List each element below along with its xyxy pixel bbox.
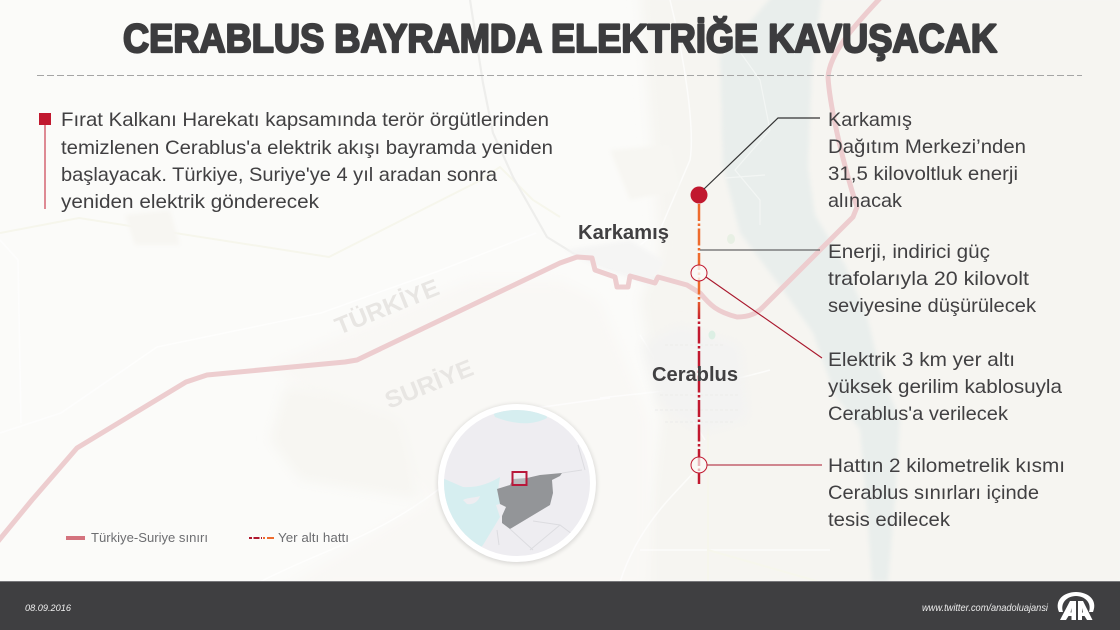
footer bar	[0, 581, 1120, 630]
callout 4: Cerablus sınırları içinde	[828, 482, 1039, 504]
callout 4: tesis edilecek	[828, 509, 950, 531]
callout 3: Elektrik 3 km yer altı	[828, 349, 1015, 371]
title: CERABLUS BAYRAMDA ELEKTRİĞE KAVUŞACAK	[123, 15, 997, 61]
legend: border: Türkiye-Suriye sınırı	[91, 531, 208, 545]
intro paragraph: Fırat Kalkanı Harekatı kapsamında terör örgütlerinden	[61, 109, 549, 131]
cyprus	[463, 496, 480, 504]
border: Türkiye-Suriye sınırı on map	[0, 0, 883, 545]
place labels	[578, 221, 738, 386]
Syria	[497, 473, 562, 529]
intro paragraph: yeniden elektrik gönderecek	[61, 191, 319, 213]
callout 3: yüksek gerilim kablosuyla	[828, 376, 1062, 398]
intro paragraph: başlayacak. Türkiye, Suriye'ye 4 yıl aradan sonra	[61, 164, 497, 186]
legend: underground line: Yer altı hattı	[278, 531, 349, 545]
callout 1: alınacak	[828, 190, 902, 212]
underground power line	[698, 204, 700, 484]
callout lines and markers	[690, 118, 822, 473]
callout 2: trafolarıyla 20 kilovolt	[828, 268, 1030, 290]
callout 3: Cerablus'a verilecek	[828, 403, 1008, 425]
callout 3	[828, 349, 1062, 425]
towns	[565, 240, 665, 285]
callout 4	[828, 455, 1065, 531]
country labels: TÜRKİYE	[331, 274, 443, 341]
callout 1: 31,5 kilovoltluk enerji	[828, 163, 1018, 185]
intro text block	[39, 109, 553, 213]
callout texts	[828, 109, 1065, 531]
callout 2: seviyesine düşürülecek	[828, 295, 1036, 317]
date: 08.09.2016	[25, 603, 72, 614]
place labels: Karkamış	[578, 221, 669, 244]
intro paragraph	[61, 109, 553, 213]
legend: underground line	[249, 531, 349, 545]
sea	[494, 410, 547, 424]
callout 1	[828, 109, 1026, 212]
locator map inset	[430, 404, 597, 564]
bullet marker	[39, 113, 51, 209]
marker: Karkamış distribution centre	[690, 186, 708, 204]
callout 1: Karkamış	[828, 109, 912, 131]
callout 1: Dağıtım Merkezi’nden	[828, 136, 1026, 158]
icon: AA logo	[1058, 592, 1094, 620]
callout 4: Hattın 2 kilometrelik kısmı	[828, 455, 1065, 477]
river	[720, 0, 900, 582]
callout 2: Enerji, indirici güç	[828, 241, 990, 263]
legend	[66, 531, 349, 545]
callout 2	[828, 241, 1036, 317]
country labels	[331, 274, 477, 415]
social link: www.twitter.com/anadoluajansi	[922, 602, 1049, 614]
place labels: Cerablus	[652, 363, 738, 386]
locator box	[512, 472, 526, 485]
intro paragraph: temizlenen Cerablus'a elektrik akışı bayramda yeniden	[61, 137, 553, 159]
country labels: SURİYE	[381, 355, 477, 415]
